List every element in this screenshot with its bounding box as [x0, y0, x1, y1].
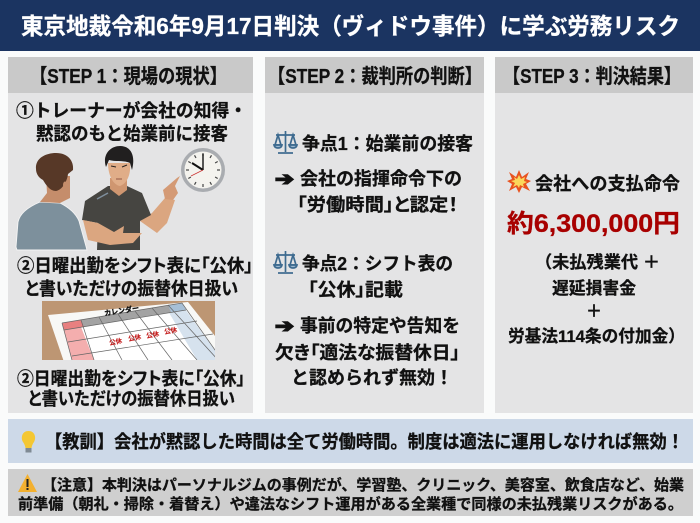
- caution text: 前準備（朝礼・掃除・着替え）や違法なシフト運用がある全業種で同様の未払残業リスクがある。: [18, 495, 683, 513]
- illustration: shift calendar: 公休: [127, 332, 142, 343]
- issue 1 conclusion: [275, 168, 462, 215]
- issue 2 heading: [302, 254, 453, 300]
- issue 2 conclusion: と認められず無効！: [291, 368, 453, 388]
- text: repeated Sunday work note: [17, 369, 245, 409]
- payment breakdown: （未払残業代 ＋: [535, 252, 660, 272]
- text: Sunday work marked as public holiday: ②日曜出勤をシフト表に「公休」: [17, 256, 253, 276]
- icon: scales 2: [274, 251, 297, 273]
- text: pre-shift customer service: 黙認のもと始業前に接客: [36, 124, 228, 144]
- title banner: 東京地裁令和6年9月17日判決（ヴィドウ事件）に学ぶ労務リスク: [21, 13, 680, 39]
- payment breakdown: 遅延損害金: [552, 278, 636, 298]
- lesson banner: [8, 419, 693, 463]
- panel: step 1 current situation: [8, 57, 253, 413]
- issue 1 heading: 争点1：始業前の接客: [302, 134, 473, 154]
- issue 1 conclusion: ➔: [275, 169, 294, 189]
- illustration: trainers and wall clock: [16, 146, 225, 250]
- payment breakdown: ＋: [586, 302, 602, 321]
- caution text: 【注意】本判決はパーソナルジムの事例だが、学習塾、クリニック、美容室、飲食店など、始業: [42, 476, 684, 494]
- heading: step 1: 【STEP 1：現場の現状】: [30, 65, 227, 88]
- issue 2 conclusion: ➔: [275, 316, 294, 336]
- wall clock: [181, 148, 225, 192]
- title banner: [0, 0, 700, 51]
- front-facing trainer pointing: [82, 146, 180, 250]
- illustration: shift calendar: [42, 301, 215, 360]
- lesson text: 【教訓】会社が黙認した時間は全て労働時間。制度は適法に運用しなければ無効！: [45, 431, 684, 452]
- caution banner: [8, 469, 693, 516]
- heading: step 2: 【STEP 2：裁判所の判断】: [268, 65, 482, 88]
- text: Sunday work marked as public holiday: [17, 256, 253, 299]
- text: Sunday work marked as public holiday: と書いただけの振替休日扱い: [25, 278, 238, 299]
- issue 2 heading: 「公休」記載: [308, 280, 403, 300]
- panel: step 2 court judgment: [265, 57, 484, 413]
- text: repeated Sunday work note: と書いただけの振替休日扱い: [28, 388, 235, 409]
- payment breakdown: [508, 252, 685, 346]
- caution text: [18, 476, 684, 513]
- issue 1 conclusion: 「労働時間」と認定！: [297, 195, 458, 215]
- illustration: shift calendar: 公休: [108, 336, 123, 347]
- text: pre-shift customer service: [16, 100, 247, 144]
- illustration: shift calendar: 公休: [163, 325, 178, 336]
- icon: light bulb: [22, 431, 35, 452]
- illustration: shift calendar: 公休: [145, 329, 160, 340]
- issue 2 conclusion: [275, 316, 460, 388]
- back-facing trainer: [16, 153, 87, 250]
- icon: scales 1: [274, 131, 297, 153]
- icon: warning triangle: [18, 474, 37, 492]
- payment breakdown: 労基法114条の付加金）: [508, 326, 685, 346]
- icon: explosion: [507, 170, 531, 193]
- illustration: shift calendar: カレンダー: [104, 303, 140, 318]
- issue 1 conclusion: 会社の指揮命令下の: [300, 168, 462, 189]
- panel: step 3 verdict: [495, 57, 693, 413]
- payment order label: 会社への支払命令: [535, 174, 680, 194]
- text: repeated Sunday work note: ②日曜出勤をシフト表に「公休」: [17, 369, 245, 389]
- issue 2 heading: 争点2：シフト表の: [302, 254, 453, 274]
- payment amount: 約6,300,000円: [507, 210, 680, 238]
- issue 2 conclusion: 事前の特定や告知を: [300, 316, 460, 336]
- issue 2 conclusion: 欠き「適法な振替休日」: [275, 342, 460, 363]
- text: pre-shift customer service: ①トレーナーが会社の知得・: [16, 100, 247, 121]
